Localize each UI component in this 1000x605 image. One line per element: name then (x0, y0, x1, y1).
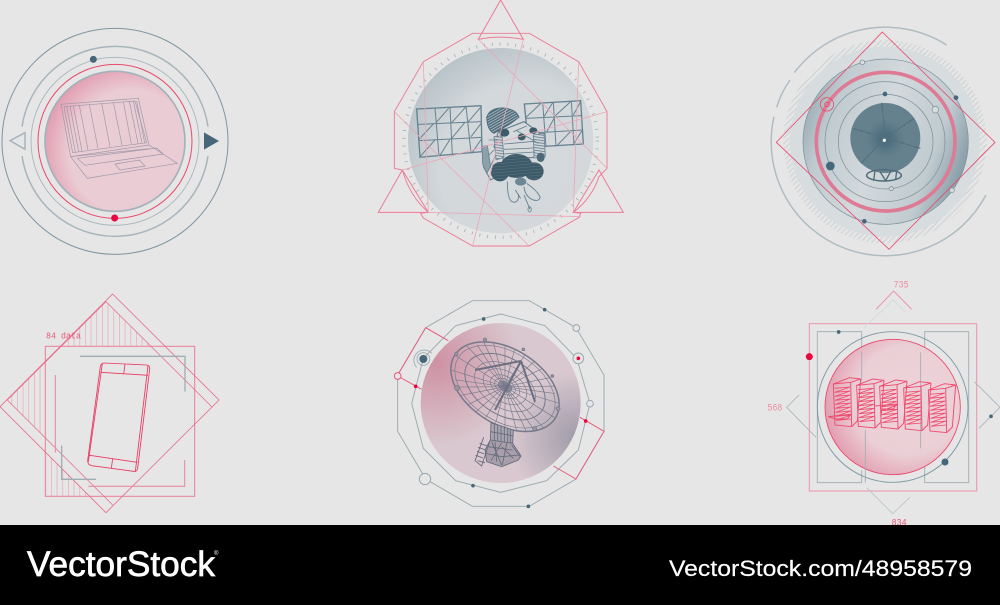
red dot (111, 214, 118, 221)
label: 84 data: 84 data (46, 332, 82, 342)
engines (491, 127, 545, 186)
bottom chevron (867, 488, 910, 514)
vertical hatching (7, 302, 151, 496)
outer arcs (771, 27, 986, 256)
inner diamond lines (7, 302, 212, 505)
icon: laptop (61, 98, 177, 178)
panel: server racks emblem (767, 279, 1000, 528)
node markers (394, 308, 593, 508)
pink diamond (0, 294, 219, 513)
dish (435, 323, 575, 450)
pink dodecagon frame (394, 33, 607, 246)
inner polygon frame (412, 314, 590, 492)
dark dot (941, 458, 948, 465)
label: 568: 568 (767, 403, 782, 414)
grey vertical lines (862, 352, 921, 483)
outer ring (2, 28, 228, 254)
thin orbits (803, 59, 968, 224)
image URL text: VectorStock.com/48958579 (669, 556, 972, 581)
left chevron (787, 395, 816, 437)
label: 834: 834 (892, 517, 907, 528)
panel: satellite emblem (378, 0, 623, 246)
pink square frame (809, 324, 977, 491)
red dot (806, 353, 813, 360)
red connectors (398, 328, 604, 479)
teal ring (817, 332, 968, 482)
icon: mesh dish (850, 103, 920, 181)
pink crossing lines (394, 39, 607, 246)
pink disc (825, 339, 960, 475)
registered mark: ® (214, 550, 219, 557)
grey disc (408, 48, 593, 233)
red ring (38, 64, 192, 218)
hatched ring (783, 40, 987, 243)
footer bar (0, 525, 1000, 605)
orbit markers (826, 60, 958, 224)
pink diamond (776, 32, 995, 249)
panel: smartphone emblem (0, 294, 219, 513)
pink square (45, 346, 195, 496)
top chevrons (876, 291, 912, 309)
broken grey rings (22, 46, 208, 236)
small dark dots (837, 330, 993, 418)
lower-right tint (421, 323, 581, 483)
panel: radio telescope emblem (394, 301, 604, 508)
left grey bracket (817, 332, 862, 483)
icon: left outline triangle (10, 133, 25, 149)
icon: right solid triangle (204, 132, 219, 150)
icon: smartphone (88, 363, 150, 472)
outer polygon frame (398, 301, 604, 506)
shaded sphere (803, 59, 968, 224)
pedestal (475, 423, 521, 467)
dark dot (90, 56, 97, 63)
pink disc (45, 71, 185, 211)
right chevron (974, 382, 1000, 428)
pink corner brackets (55, 375, 185, 486)
thin grey ring (31, 57, 199, 225)
brand name: VectorStock (27, 545, 215, 584)
upper-left tint (421, 323, 581, 483)
pink orbit (816, 72, 955, 211)
right grey bracket (925, 332, 969, 483)
panel: orbit dish emblem (771, 27, 995, 256)
icon: server racks (828, 378, 956, 433)
pale disc (790, 47, 980, 237)
shaded sphere (421, 323, 581, 483)
label: 735: 735 (894, 279, 909, 290)
hatched dome (487, 108, 519, 133)
satellite body (482, 122, 545, 180)
top grey chevron (863, 300, 906, 328)
rim nodes (455, 338, 560, 431)
pink triangles (378, 0, 623, 212)
icon: satellite (417, 101, 583, 212)
left solar panel (417, 106, 482, 157)
grey corner brackets (62, 356, 185, 479)
red target (820, 98, 834, 111)
feed struts (475, 361, 535, 410)
antenna cables (507, 182, 540, 209)
panel: laptop emblem (2, 28, 228, 254)
tick ring (404, 44, 597, 237)
icon: dish antenna (435, 323, 575, 467)
right solar panel (524, 101, 583, 147)
